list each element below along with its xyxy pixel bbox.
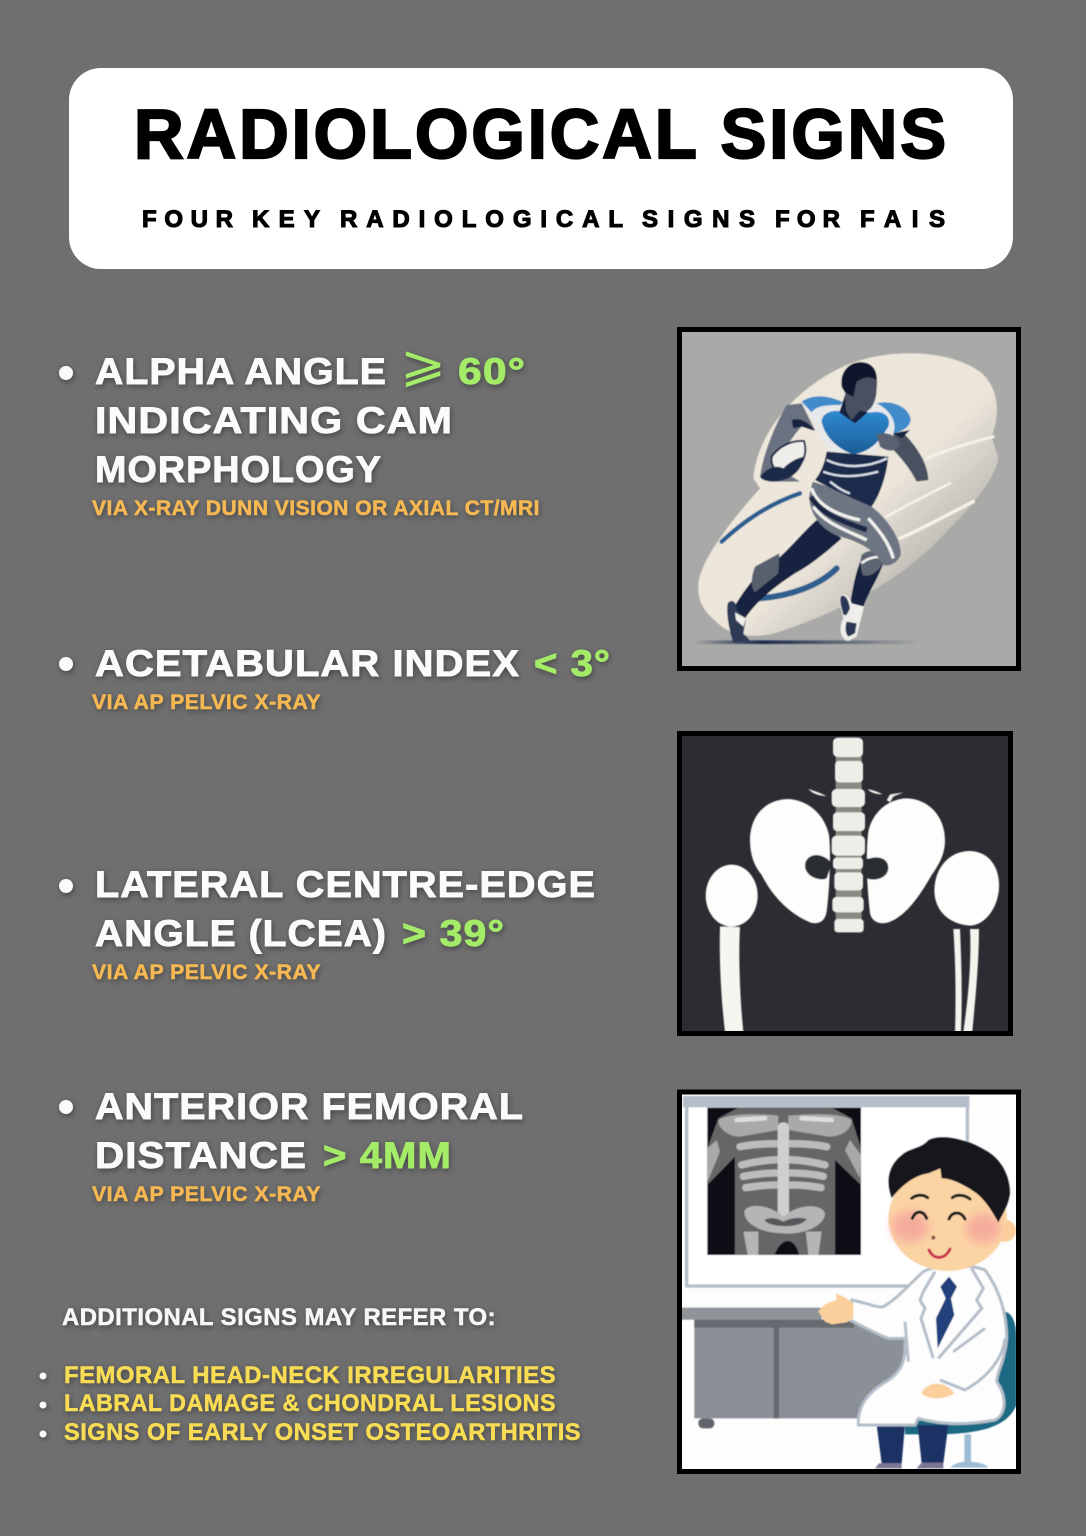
heading: ANTERIOR FEMORAL bbox=[95, 1085, 524, 1127]
subtitle: FAIS bbox=[860, 206, 945, 233]
header panel bbox=[69, 68, 1013, 269]
lightbox bbox=[683, 1096, 969, 1286]
heading line 3: MORPHOLOGY bbox=[95, 448, 382, 490]
threshold symbol: ⩾ bbox=[400, 335, 446, 394]
additional signs heading: ADDITIONAL SIGNS MAY REFER TO: bbox=[62, 1304, 496, 1331]
subtitle: FOR bbox=[775, 206, 840, 233]
trousers bbox=[877, 1425, 948, 1463]
front lower leg bbox=[850, 558, 883, 607]
hand on knee bbox=[921, 1384, 954, 1398]
imaging note: VIA AP PELVIC X-RAY bbox=[92, 1183, 321, 1206]
bullet bbox=[59, 366, 73, 380]
head bbox=[842, 363, 877, 412]
eyes and brows bbox=[912, 1195, 970, 1219]
title: RADIOLOGICAL SIGNS bbox=[134, 95, 949, 173]
left femoral head bbox=[706, 865, 758, 927]
bullet bbox=[59, 879, 73, 893]
obturator holes bbox=[805, 855, 832, 879]
list item 2: LABRAL DAMAGE & CHONDRAL LESIONS bbox=[64, 1390, 556, 1417]
ball arm bbox=[760, 403, 815, 482]
running arm bbox=[893, 432, 928, 482]
left femur shaft bbox=[720, 926, 743, 1032]
back leg bbox=[733, 520, 842, 618]
heading: LATERAL CENTRE-EDGE bbox=[95, 863, 596, 905]
bullet bbox=[59, 657, 73, 671]
additional signs block bbox=[40, 1304, 581, 1446]
threshold value: > 39° bbox=[402, 912, 505, 954]
heading line 2: DISTANCE bbox=[95, 1134, 307, 1176]
heading: ACETABULAR INDEX bbox=[95, 642, 520, 684]
torso bbox=[815, 452, 888, 507]
hips and wrap bbox=[809, 482, 901, 565]
sign 2: acetabular index bbox=[59, 642, 611, 714]
subtitle bbox=[142, 206, 945, 233]
threshold value: 60° bbox=[458, 350, 526, 392]
shoes bbox=[875, 1463, 943, 1468]
front shoe bbox=[840, 595, 864, 641]
cabinet bbox=[680, 1308, 908, 1428]
image panel: doctor with x-ray bbox=[680, 1092, 1019, 1472]
heading line 2: INDICATING CAM bbox=[95, 399, 453, 441]
right iliac wing bbox=[867, 798, 945, 923]
imaging note: VIA X-RAY DUNN VISION OR AXIAL CT/MRI bbox=[92, 497, 540, 520]
back shoe bbox=[727, 601, 751, 642]
imaging note: VIA AP PELVIC X-RAY bbox=[92, 691, 321, 714]
chair bbox=[905, 1312, 1016, 1468]
pointing hand bbox=[818, 1293, 853, 1324]
threshold value: > 4MM bbox=[323, 1134, 452, 1176]
ground shadow bbox=[693, 640, 920, 644]
list item 3: SIGNS OF EARLY ONSET OSTEOARTHRITIS bbox=[64, 1419, 581, 1446]
subtitle: SIGNS bbox=[642, 206, 755, 233]
speed streaks bbox=[722, 437, 993, 598]
smile bbox=[929, 1249, 950, 1257]
tie bbox=[936, 1277, 957, 1348]
image panel: rugby runner bbox=[680, 330, 1019, 669]
right femoral head bbox=[934, 851, 999, 926]
coat arm bbox=[940, 1338, 1005, 1390]
right femur shafts bbox=[953, 929, 979, 1032]
left iliac wing bbox=[750, 799, 830, 923]
subtitle: RADIOLOGICAL bbox=[340, 206, 623, 233]
sign 4: anterior femoral distance bbox=[59, 1085, 524, 1206]
subtitle: KEY bbox=[252, 206, 320, 233]
athlete bbox=[727, 362, 928, 642]
bullet bbox=[59, 1100, 73, 1114]
sign 3: lateral centre-edge angle bbox=[59, 863, 596, 984]
heading: ALPHA ANGLE bbox=[95, 350, 387, 392]
coat lapels bbox=[905, 1268, 985, 1362]
spine bbox=[832, 738, 865, 932]
x-ray film bbox=[707, 1108, 861, 1255]
motion swoosh bbox=[698, 353, 998, 636]
rib fragments bbox=[808, 789, 903, 802]
hair bbox=[888, 1137, 1010, 1222]
head bbox=[888, 1137, 1016, 1271]
threshold value: < 3° bbox=[534, 642, 611, 684]
list item 1: FEMORAL HEAD-NECK IRREGULARITIES bbox=[64, 1362, 556, 1389]
rugby ball bbox=[771, 441, 805, 475]
nose bbox=[931, 1236, 935, 1240]
shirt shoulders bbox=[802, 396, 911, 453]
sign 1: alpha angle bbox=[59, 335, 540, 520]
image panel: pelvic x-ray illustration bbox=[680, 734, 1011, 1034]
subtitle: FOUR bbox=[142, 206, 233, 233]
neck and collar bbox=[839, 395, 868, 423]
heading line 2: ANGLE (LCEA) bbox=[95, 912, 387, 954]
imaging note: VIA AP PELVIC X-RAY bbox=[92, 961, 321, 984]
lab coat bbox=[850, 1266, 1007, 1425]
